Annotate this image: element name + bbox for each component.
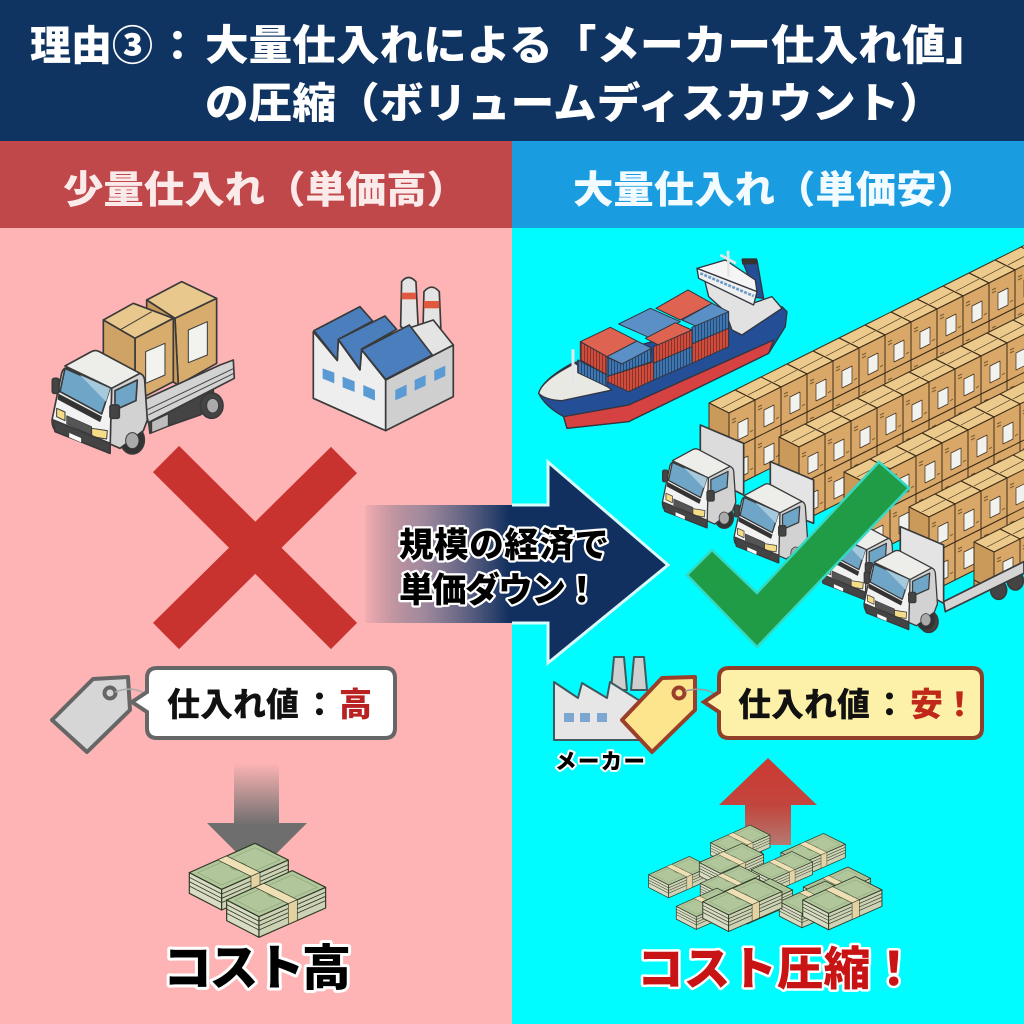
truck two: [734, 462, 814, 563]
callout: low purchase price: ：: [873, 686, 906, 723]
arrow: economies of scale: [365, 462, 668, 663]
icon: container ship: [539, 251, 787, 428]
title line two: の圧縮（ボリュームディスカウント）: [205, 80, 943, 127]
left header: small-volume purchasing: [0, 141, 512, 228]
right header: bulk purchasing: [512, 141, 1024, 228]
callout: high purchase price: 高: [339, 686, 372, 723]
cost compressed label: コスト圧縮！: [637, 943, 917, 995]
icon: fleet of trucks: [662, 425, 1024, 632]
callout: low purchase price: 安！: [910, 686, 976, 723]
truck one: [662, 425, 744, 528]
icon: grey price tag: [52, 677, 146, 752]
icon: green check mark: [687, 462, 909, 647]
truck three: [821, 521, 894, 600]
cost high label: コスト高: [163, 942, 351, 996]
icon: two money bundles: [189, 843, 326, 937]
title line one: 理由③: [30, 23, 153, 69]
panel: right background: [512, 228, 1024, 1024]
icon: huge stacks of boxes: [709, 234, 1024, 640]
arrow: down grey: [207, 763, 307, 873]
callout: high purchase price: [132, 668, 395, 738]
title colon: ：: [157, 23, 198, 69]
right header: bulk purchasing: 大量仕入れ（単価安）: [573, 170, 977, 212]
truck four: [864, 527, 1024, 632]
containers: [578, 290, 729, 392]
icon: small maker factory: [554, 657, 648, 740]
maker label: メーカー: [555, 750, 645, 774]
icon: small truck with two boxes: [52, 282, 234, 454]
title banner: [0, 0, 1024, 141]
callout: low purchase price: [704, 668, 982, 738]
arrow label line one: 規模の経済で: [399, 527, 609, 565]
arrow label line two: 単価ダウン！: [399, 571, 599, 610]
title line one continued: 大量仕入れによる「メーカー仕入れ値」: [205, 22, 989, 69]
callout: high purchase price: ：: [303, 686, 336, 723]
left header: small-volume purchasing: 少量仕入れ（単価高）: [63, 170, 467, 212]
icon: pile of money: [649, 825, 882, 932]
superstructure: [705, 280, 782, 335]
callout: low purchase price: 仕入れ値: [738, 686, 870, 723]
callout: high purchase price: 仕入れ値: [167, 686, 299, 723]
icon: red cross: [166, 459, 344, 636]
arrow: up red: [719, 758, 817, 845]
icon: factory: [313, 277, 453, 431]
icon: yellow price tag: [622, 677, 716, 752]
